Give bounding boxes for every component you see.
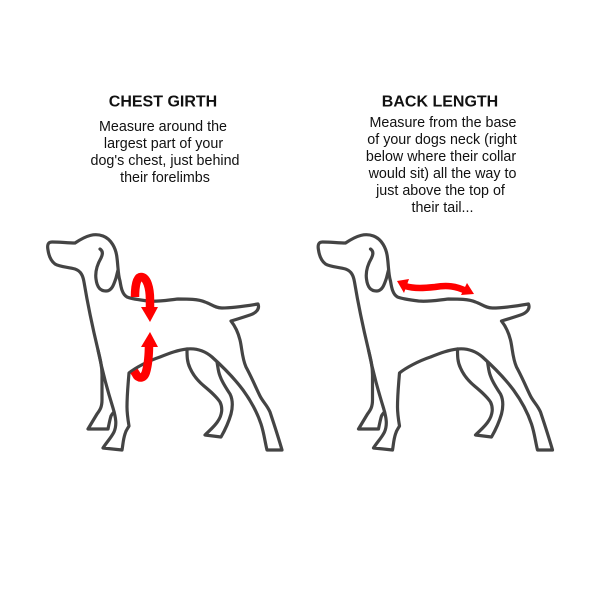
icon: dog outline xyxy=(48,235,282,450)
text block: chest girth instructions: Measure around the xyxy=(99,119,227,135)
text block: back length instructions: below where their collar xyxy=(366,149,516,165)
text block: chest girth instructions: dog's chest, just behind xyxy=(91,153,240,169)
text block: back length instructions: of your dogs neck (right xyxy=(367,132,517,148)
arrow: back length measurement xyxy=(397,279,474,295)
text block: back length instructions: would sit) all the way to xyxy=(368,166,516,182)
text block: back length instructions: Measure from the base xyxy=(369,115,517,131)
heading: chest girth: CHEST GIRTH xyxy=(109,94,217,110)
text block: back length instructions: their tail... xyxy=(412,200,473,216)
arrow: chest girth measurement xyxy=(134,277,158,378)
text block: chest girth instructions: their forelimbs xyxy=(120,170,210,186)
text block: back length instructions: just above the top of xyxy=(375,183,505,199)
panel: chest girth xyxy=(48,94,282,450)
panel: back length xyxy=(318,94,552,450)
text block: chest girth instructions: largest part of your xyxy=(104,136,223,152)
icon: dog outline xyxy=(318,235,552,450)
heading: back length: BACK LENGTH xyxy=(382,94,498,110)
